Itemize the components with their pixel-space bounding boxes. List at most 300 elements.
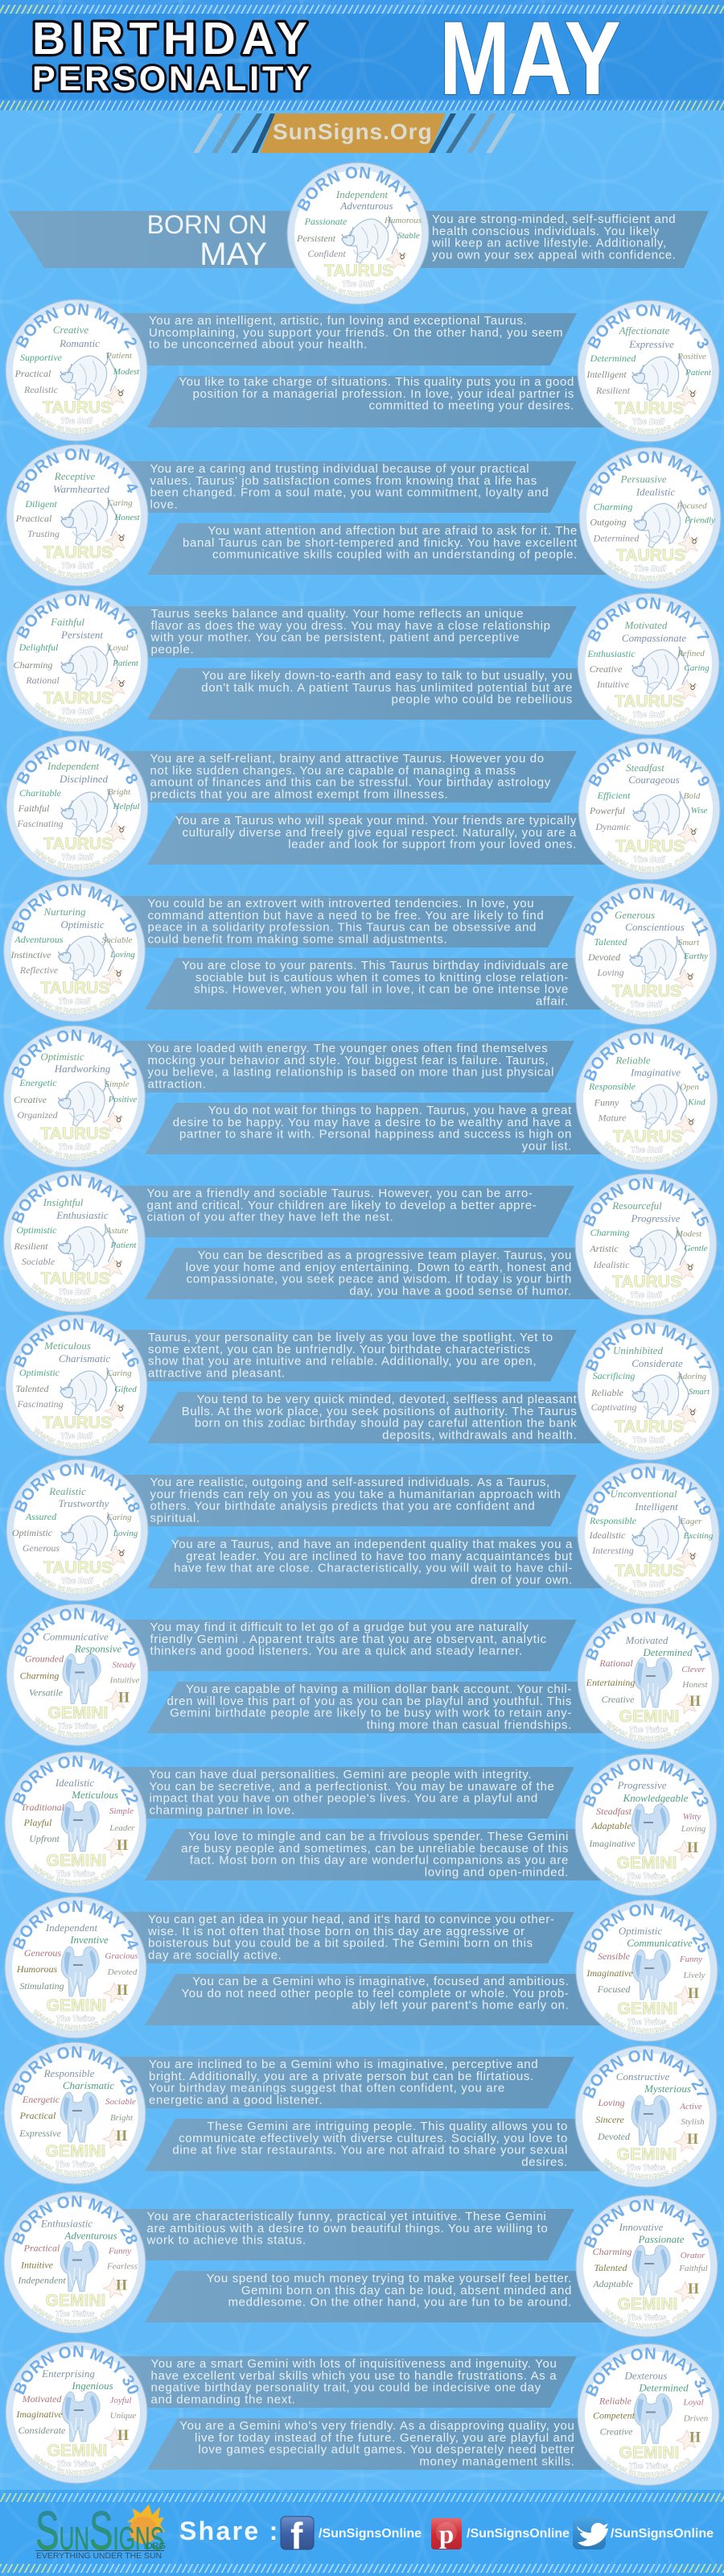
badge: May 9 bbox=[578, 738, 720, 880]
icon: facebook bbox=[281, 2515, 314, 2557]
badge: May 15: Charming bbox=[590, 1227, 629, 1238]
badge: May 1: Confident bbox=[307, 248, 346, 259]
badge: May 30: The Twins bbox=[57, 2460, 97, 2469]
badge: May 17: WWW.SUNSIGNS.ORG bbox=[605, 1431, 691, 1454]
row: May 6 and 7 text panels bbox=[121, 606, 607, 720]
badge: May 22: Idealistic bbox=[55, 1777, 94, 1789]
badge: May 25: Sensible bbox=[598, 1951, 631, 1962]
badge: May 1 bbox=[286, 162, 430, 305]
badge: May 6: Loyal bbox=[107, 643, 129, 653]
row: May 24 and 25 text panels: boisterous but you could be a bit spoiled. The Gemini born on this bbox=[148, 1937, 533, 1951]
row: May 26 and 27 text panels: Your birthday meanings suggest that often confident, you are bbox=[149, 2082, 505, 2095]
badge: May 29: Charming bbox=[593, 2246, 631, 2257]
row: May 18 and 19 text panels: great leader. You are inclined to have too many acquaintances but bbox=[186, 1550, 573, 1563]
badge: May 11: Talented bbox=[594, 936, 627, 947]
badge: May 15: Gentle bbox=[684, 1244, 708, 1253]
badge: May 31: Dexterous bbox=[624, 2370, 667, 2381]
badge: May 8: Bright bbox=[108, 787, 131, 797]
badge: May 4: BORN ON MAY 4 bbox=[16, 448, 138, 493]
badge: May 10: The Bull bbox=[59, 997, 90, 1006]
badge: May 25: Funny bbox=[679, 1955, 702, 1964]
badge: May 4 bbox=[6, 444, 149, 587]
badge: May 2: Creative bbox=[53, 324, 88, 336]
badge: May 24: Gracious bbox=[105, 1951, 138, 1961]
title: birthday personality: PERSONALITY bbox=[32, 60, 313, 98]
row: May 8 and 9 text panels: amount of finances and this can be stressful. Your birthday astrology bbox=[150, 776, 551, 790]
badge: May 2: Practical bbox=[14, 368, 51, 379]
badge: May 1: ♉ bbox=[398, 251, 406, 262]
row: May 20 and 21 text panels: thing more than casual friendships. bbox=[367, 1718, 572, 1732]
badge: May 11 bbox=[575, 883, 717, 1025]
badge: May 14: WWW.SUNSIGNS.ORG bbox=[31, 1283, 117, 1306]
badge: May 29: Passionate bbox=[637, 2233, 685, 2245]
badge: May 16: Charismatic bbox=[59, 1352, 110, 1364]
badge: May 28: II bbox=[116, 2277, 127, 2294]
badge: May 2: Realistic bbox=[23, 384, 59, 395]
row: May 6 and 7 text panels: Taurus seeks balance and quality. Your home reflects an unique bbox=[151, 607, 524, 621]
panel: born on may intro band: MAY bbox=[200, 237, 267, 272]
badge: May 27: Stylish bbox=[681, 2117, 705, 2127]
row: May 2 and 3 text panels: Uncomplaining, you support your friends. On the other hand, you seem bbox=[149, 326, 563, 340]
row: May 28 and 29 text panels: Gemini born on this day can be loud, absent minded and bbox=[241, 2284, 572, 2297]
row: May 28 and 29 text panels: You are characteristically funny, practical yet intuitive. These Gemini bbox=[146, 2210, 546, 2223]
badge: May 6: ♉ bbox=[117, 679, 125, 689]
badge: May 26: Energetic bbox=[22, 2094, 60, 2105]
badge: May 20: Intuitive bbox=[109, 1676, 139, 1686]
badge: May 3: Intelligent bbox=[586, 369, 627, 380]
badge: May 11: Earthy bbox=[683, 952, 708, 961]
badge: May 26: Responsible bbox=[43, 2067, 95, 2079]
badge: May 29: The Twins bbox=[627, 2314, 667, 2322]
badge: May 25: Lively bbox=[683, 1971, 705, 1980]
logo: sunsigns: EVERYTHING UNDER THE SUN bbox=[36, 2552, 162, 2561]
badge: May 25: GEMINI bbox=[618, 2000, 677, 2018]
row: May 20 and 21 text panels bbox=[121, 1620, 607, 1733]
badge: May 26: Sociable bbox=[105, 2097, 136, 2107]
badge: May 21: Rational bbox=[599, 1657, 633, 1669]
badge: May 3: Expressive bbox=[628, 338, 674, 350]
row: May 26 and 27 text panels: dine at five star restaurants. You are not afraid to share your sexual bbox=[172, 2144, 568, 2157]
row: May 2 and 3 text panels: to be unconcerned about your health. bbox=[149, 338, 368, 352]
badge: May 12: TAURUS bbox=[41, 1125, 109, 1143]
badge: May 15: Resourceful bbox=[611, 1199, 662, 1212]
badge: May 24: The Twins bbox=[56, 2015, 96, 2024]
badge: May 8: Independent bbox=[47, 760, 100, 772]
title: birthday personality bbox=[32, 13, 313, 98]
row: May 10 and 11 text panels bbox=[119, 896, 605, 1009]
badge: May 1: TAURUS bbox=[324, 262, 393, 280]
badge: May 7: ♉ bbox=[689, 682, 697, 692]
badge: May 20: GEMINI bbox=[48, 1703, 108, 1723]
row: May 2 and 3 text panels: You like to take charge of situations. This quality puts you in a good bbox=[179, 375, 574, 389]
badge: May 25: WWW.SUNSIGNS.ORG bbox=[602, 2012, 692, 2037]
badge: May 23: Witty bbox=[683, 1812, 701, 1822]
row: May 24 and 25 text panels: day are socially active. bbox=[148, 1948, 282, 1962]
row: May 30 and 31 text panels: You are a Gemini who's very friendly. As a disapproving quality, you bbox=[179, 2419, 574, 2433]
badge: May 1: WWW.SUNSIGNS.ORG bbox=[315, 275, 401, 298]
badge: May 5: Persuasive bbox=[619, 473, 667, 485]
badge: May 13: Imaginative bbox=[630, 1066, 681, 1079]
share label: Share : bbox=[179, 2516, 280, 2545]
badge: May 4: Trusting bbox=[27, 528, 60, 539]
badge: May 14: TAURUS bbox=[41, 1269, 109, 1288]
badge: May 21: Clever bbox=[681, 1665, 705, 1674]
badge: May 21: GEMINI bbox=[619, 1707, 679, 1726]
badge: May 8: ♉ bbox=[117, 824, 125, 835]
badge: May 27: II bbox=[687, 2131, 698, 2148]
badge: May 3: Determined bbox=[590, 353, 636, 364]
badge: May 6: The Bull bbox=[61, 708, 93, 716]
badge: May 14: Resilient bbox=[13, 1241, 48, 1252]
row: May 26 and 27 text panels: communicate effectively with diverse cultures. Socially, you love to bbox=[179, 2132, 568, 2145]
badge: May 5: Friendly bbox=[684, 515, 715, 525]
badge: May 31: Driven bbox=[683, 2413, 709, 2423]
badge: May 21: WWW.SUNSIGNS.ORG bbox=[603, 1719, 693, 1744]
badge: May 16: Meticulous bbox=[43, 1340, 91, 1352]
badge: May 22: The Twins bbox=[56, 1870, 96, 1879]
badge: May 5: TAURUS bbox=[616, 546, 685, 565]
badge: May 31: Reliable bbox=[599, 2396, 632, 2407]
badge: May 24: GEMINI bbox=[47, 1996, 106, 2015]
badge: May 24: WWW.SUNSIGNS.ORG bbox=[31, 2008, 121, 2033]
badge: May 14: Optimistic bbox=[16, 1224, 57, 1236]
badge: May 1: Stable bbox=[397, 231, 420, 241]
site banner bbox=[193, 114, 516, 153]
row: May 2 and 3 text panels: committed to meeting your desires. bbox=[368, 399, 574, 413]
row: May 16 and 17 text panels: Taurus, your personality can be lively as you love the spotlight. Yet to bbox=[148, 1331, 553, 1344]
row: May 24 and 25 text panels: You can be a Gemini who is imaginative, focused and ambitious. bbox=[192, 1975, 570, 1988]
badge: May 18 bbox=[6, 1459, 148, 1601]
badge: May 10: Nurturing bbox=[43, 906, 86, 918]
icon: pinterest: p bbox=[439, 2520, 454, 2549]
badge: May 17 bbox=[578, 1319, 719, 1460]
badge: May 28: Adventurous bbox=[64, 2230, 117, 2241]
row: May 16 and 17 text panels: some extent, you can be unfriendly. Your birthdate characteristics bbox=[148, 1343, 530, 1356]
row: May 18 and 19 text panels bbox=[121, 1475, 607, 1588]
site banner: SunSigns.Org bbox=[273, 119, 433, 144]
row: May 28 and 29 text panels: work to achieve this status. bbox=[146, 2234, 306, 2248]
badge: May 1: Persistent bbox=[296, 233, 336, 244]
badge: May 9: Bold bbox=[684, 791, 701, 801]
row: May 16 and 17 text panels: show that you are intuitive and reliable. Additionally, you are open, bbox=[148, 1355, 537, 1368]
row: May 30 and 31 text panels: live for today instead of the future. Generally, you are playful and bbox=[195, 2431, 574, 2445]
row: May 18 and 19 text panels: You are realistic, outgoing and self-assured individuals. As a Taurus, bbox=[150, 1476, 550, 1489]
badge: May 3: BORN ON MAY 3 bbox=[587, 304, 710, 349]
badge: May 1: BORN ON MAY 1 bbox=[296, 166, 418, 213]
badge: May 1: Humorous bbox=[384, 216, 422, 225]
badge: May 4: The Bull bbox=[61, 562, 93, 571]
row: May 24 and 25 text panels bbox=[119, 1912, 605, 2025]
icon: pinterest bbox=[431, 2518, 462, 2549]
badge: May 30: BORN ON MAY 30 bbox=[10, 2343, 143, 2397]
badge: May 31: Creative bbox=[600, 2426, 633, 2438]
title: may: MAY bbox=[439, 0, 621, 117]
badge: May 23: Loving bbox=[681, 1824, 706, 1834]
badge: May 25: Focused bbox=[597, 1984, 631, 1995]
panel: born on may intro band: will keep an active lifestyle. Additionally, bbox=[431, 237, 667, 250]
badge: May 17: BORN ON MAY 17 bbox=[585, 1322, 712, 1372]
badge: May 30: Unique bbox=[110, 2411, 136, 2421]
badge: May 16: The Bull bbox=[60, 1432, 93, 1441]
row: May 18 and 19 text panels: dren of your own. bbox=[471, 1573, 573, 1587]
badge: May 28 bbox=[4, 2191, 146, 2333]
badge: May 24: Humorous bbox=[16, 1963, 57, 1975]
badge: May 3 bbox=[577, 299, 720, 443]
badge: May 28: The Twins bbox=[56, 2310, 95, 2318]
badge: May 26: Bright bbox=[110, 2113, 134, 2123]
badge: May 6: BORN ON MAY 6 bbox=[16, 594, 138, 639]
badge: May 17: Sacrificing bbox=[593, 1370, 635, 1381]
badge: May 12: Positive bbox=[108, 1095, 137, 1104]
badge: May 23: Knowledgeable bbox=[623, 1792, 689, 1804]
row: May 12 and 13 text panels: your list. bbox=[522, 1139, 572, 1153]
badge: May 12: The Bull bbox=[59, 1143, 90, 1152]
badge: May 28: Enthusiastic bbox=[40, 2217, 93, 2230]
row: May 20 and 21 text panels: dren will love this part of you as you can be playful and youthful. This bbox=[167, 1695, 572, 1708]
badge: May 21: Entertaining bbox=[586, 1677, 635, 1688]
badge: May 7: Motivated bbox=[624, 619, 668, 631]
row: May 12 and 13 text panels: desire to be happy. You may have a desire to be wealthy and have a bbox=[173, 1116, 572, 1129]
badge: May 4: Warmhearted bbox=[53, 483, 110, 495]
badge: May 19: Intelligent bbox=[634, 1501, 678, 1513]
badge: May 8: TAURUS bbox=[43, 835, 113, 853]
badge: May 2: Patient bbox=[105, 351, 133, 361]
badge: May 23: Steadfast bbox=[596, 1806, 632, 1817]
badge: May 30: Ingenious bbox=[71, 2380, 113, 2392]
badge: May 25: Communicative bbox=[627, 1937, 693, 1949]
badge: May 7: BORN ON MAY 7 bbox=[587, 597, 710, 642]
badge: May 3: Affectionate bbox=[619, 324, 670, 336]
badge: May 11: TAURUS bbox=[612, 982, 681, 1001]
badge: May 30: Joyful bbox=[110, 2396, 131, 2405]
badge: May 20: Grounded bbox=[25, 1653, 64, 1665]
badge: May 17: Adoring bbox=[677, 1372, 707, 1381]
row: May 22 and 23 text panels: impact that you have on other people's lives. You are a playful and bbox=[150, 1792, 538, 1806]
badge: May 21: Determined bbox=[642, 1646, 693, 1658]
badge: May 21: II bbox=[689, 1693, 701, 1710]
badge: May 28: Independent bbox=[17, 2275, 66, 2286]
badge: May 15 bbox=[575, 1174, 717, 1315]
badge: May 21: BORN ON MAY 21 bbox=[582, 1608, 715, 1663]
badge: May 11: Conscientious bbox=[625, 921, 685, 933]
badge: May 5: Focused bbox=[676, 501, 707, 510]
badge: May 23: Adaptable bbox=[590, 1820, 631, 1831]
badge: May 6: WWW.SUNSIGNS.ORG bbox=[34, 703, 120, 724]
row: May 14 and 15 text panels: day, you have a good sense of humor. bbox=[349, 1284, 572, 1298]
row: May 10 and 11 text panels: peace in a solidarity profession. This Taurus can be obsessive and bbox=[148, 921, 537, 935]
badge: May 26: WWW.SUNSIGNS.ORG bbox=[30, 2154, 120, 2179]
badge: May 11: Loving bbox=[596, 967, 624, 978]
badge: May 2: Supportive bbox=[20, 352, 63, 363]
badge: May 26: Charismatic bbox=[63, 2079, 114, 2091]
row: May 10 and 11 text panels: affair. bbox=[536, 994, 569, 1008]
badge: May 22: WWW.SUNSIGNS.ORG bbox=[31, 1864, 121, 1889]
row: May 10 and 11 text panels: sociable but is cautious when it comes to knitting close relation- bbox=[195, 971, 569, 985]
badge: May 9: BORN ON MAY 9 bbox=[587, 742, 710, 787]
badge: May 12: Hardworking bbox=[54, 1063, 111, 1075]
badge: May 20: Versatile bbox=[29, 1687, 64, 1699]
row: May 16 and 17 text panels bbox=[121, 1330, 607, 1443]
panel: born on may intro band: BORN ON bbox=[147, 210, 267, 239]
badge: May 16: Gifted bbox=[114, 1385, 137, 1394]
badge: May 10: TAURUS bbox=[41, 979, 109, 997]
badge: May 18: Generous bbox=[23, 1542, 60, 1554]
badge: May 20: Charming bbox=[20, 1670, 59, 1681]
badge: May 16: WWW.SUNSIGNS.ORG bbox=[34, 1427, 119, 1449]
row: May 18 and 19 text panels: have few that are close. Characteristically, you will wait to have chil- bbox=[174, 1562, 573, 1575]
badge: May 18: Trustworthy bbox=[59, 1497, 109, 1509]
row: May 4 and 5 text panels: You want attention and affection but are afraid to ask for it. The bbox=[208, 524, 578, 538]
badge: May 6: Faithful bbox=[50, 616, 84, 628]
badge: May 12: WWW.SUNSIGNS.ORG bbox=[31, 1138, 117, 1161]
badge: May 24: Generous bbox=[24, 1947, 61, 1959]
badge: May 18: Assured bbox=[25, 1511, 57, 1522]
badge: May 5: WWW.SUNSIGNS.ORG bbox=[607, 560, 693, 582]
badge: May 25: Optimistic bbox=[619, 1925, 662, 1937]
badge: May 5: Outgoing bbox=[590, 517, 627, 528]
badge: May 30: Considerate bbox=[19, 2425, 66, 2436]
row: May 16 and 17 text panels: Bulls. At the work place, you seek positions of authority. The Taurus bbox=[182, 1405, 578, 1418]
badge: May 22: II bbox=[117, 1837, 128, 1854]
badge: May 6: Delightful bbox=[19, 642, 59, 653]
badge: May 31: Determined bbox=[638, 2381, 689, 2394]
badge: May 29: GEMINI bbox=[618, 2295, 677, 2314]
badge: May 19: BORN ON MAY 19 bbox=[585, 1466, 711, 1516]
badge: May 21: The Twins bbox=[629, 1726, 668, 1735]
badge: May 5: The Bull bbox=[634, 565, 666, 573]
badge: May 24: Stimulating bbox=[19, 1980, 64, 1992]
badge: May 12: Simple bbox=[105, 1080, 130, 1089]
row: May 22 and 23 text panels: are busy people and sometimes, can be unreliable because of this bbox=[181, 1842, 569, 1856]
badge: May 29: Faithful bbox=[678, 2264, 708, 2273]
badge: May 9: Powerful bbox=[589, 805, 626, 816]
badge: May 12: Organized bbox=[17, 1109, 59, 1121]
row: May 10 and 11 text panels: You could be an extrovert with introverted tendencies. In love, you bbox=[148, 897, 534, 910]
badge: May 15: Idealistic bbox=[593, 1259, 630, 1270]
badge: May 5: BORN ON MAY 5 bbox=[589, 451, 711, 496]
row: May 10 and 11 text panels: ships. However, when you fall in love, it can be one intense love bbox=[194, 983, 569, 997]
badge: May 22: Meticulous bbox=[71, 1789, 118, 1801]
badge: May 22: Leader bbox=[109, 1823, 135, 1833]
badge: May 21 bbox=[578, 1608, 719, 1749]
badge: May 29: Orator bbox=[681, 2251, 705, 2260]
badge: May 9: The Bull bbox=[633, 856, 665, 865]
row: May 4 and 5 text panels: love. bbox=[150, 497, 178, 511]
badge: May 22 bbox=[5, 1752, 146, 1893]
badge: May 14: BORN ON MAY 14 bbox=[11, 1174, 138, 1224]
row: May 22 and 23 text panels: charming partner in love. bbox=[150, 1803, 295, 1817]
badge: May 13: Funny bbox=[594, 1096, 619, 1108]
badge: May 15: TAURUS bbox=[612, 1273, 681, 1291]
row: May 22 and 23 text panels: You love to mingle and can be a frivolous spender. These Gemini bbox=[188, 1830, 569, 1843]
badge: May 19: Idealistic bbox=[589, 1530, 626, 1541]
title: birthday personality: BIRTHDAY bbox=[32, 13, 313, 64]
badge: May 15: Progressive bbox=[630, 1212, 681, 1224]
badge: May 1: Adventurous bbox=[339, 200, 393, 212]
row: May 30 and 31 text panels: love games especially adult games. You desperately need better bbox=[198, 2443, 574, 2457]
badge: May 10 bbox=[3, 880, 145, 1022]
badge: May 10: BORN ON MAY 10 bbox=[11, 883, 137, 933]
badge: May 11: Generous bbox=[615, 909, 655, 921]
row: May 6 and 7 text panels: people. bbox=[151, 642, 194, 656]
row: May 14 and 15 text panels: You are a friendly and sociable Taurus. However, you can be arro- bbox=[146, 1187, 533, 1200]
panel: born on may intro band: you own your sex appeal with confidence. bbox=[432, 248, 677, 262]
badge: May 9: Dynamic bbox=[594, 821, 631, 832]
badge: May 8: Charitable bbox=[19, 787, 62, 799]
row: May 24 and 25 text panels: You can get an idea in your head, and it's hard to convince you other- bbox=[148, 1913, 555, 1926]
badge: May 13: The Bull bbox=[631, 1146, 663, 1154]
badge: May 16 bbox=[6, 1315, 147, 1456]
badge: May 14: Enthusiastic bbox=[56, 1209, 109, 1221]
row: May 2 and 3 text panels: position for a managerial profession. In love, your ideal partner is bbox=[193, 387, 574, 401]
row: May 18 and 19 text panels: others. Your birthdate analysis predicts that you are confident and bbox=[150, 1500, 535, 1513]
badge: May 30: WWW.SUNSIGNS.ORG bbox=[31, 2454, 121, 2479]
row: May 30 and 31 text panels bbox=[121, 2356, 607, 2470]
badge: May 5: ♉ bbox=[690, 536, 698, 546]
badge: May 13: Responsible bbox=[588, 1080, 636, 1092]
row: May 6 and 7 text panels: You are likely down-to-earth and easy to talk to but usually, you bbox=[202, 669, 573, 683]
badge: May 10: Reflective bbox=[19, 964, 59, 976]
badge: May 30: Motivated bbox=[22, 2393, 62, 2405]
icon: facebook: f bbox=[290, 2515, 303, 2557]
badge: May 20: BORN ON MAY 20 bbox=[14, 1607, 140, 1657]
badge: May 1: The Bull bbox=[342, 280, 374, 289]
badge: May 4: Honest bbox=[113, 513, 141, 522]
badge: May 6: Persistent bbox=[60, 629, 103, 641]
badge: May 20 bbox=[6, 1604, 148, 1745]
row: May 30 and 31 text panels: You are a smart Gemini with lots of inquisitiveness and ingenuity. You bbox=[151, 2357, 557, 2371]
badge: May 13: Open bbox=[680, 1082, 699, 1092]
row: May 30 and 31 text panels: money management skills. bbox=[419, 2454, 574, 2468]
badge: May 10: ♉ bbox=[115, 968, 122, 979]
badge: May 31 bbox=[578, 2344, 719, 2486]
badge: May 29: Innovative bbox=[619, 2221, 664, 2233]
row: May 28 and 29 text panels: meddlesome. On the other hand, you are fun to be around. bbox=[228, 2296, 572, 2310]
badge: May 27: Sincere bbox=[595, 2114, 624, 2125]
badge: May 17: Captivating bbox=[591, 1402, 636, 1413]
badge: May 30: II bbox=[117, 2427, 129, 2444]
row: May 20 and 21 text panels: You may find it difficult to let go of a grudge but you are naturally bbox=[150, 1620, 529, 1634]
badge: May 27: The Twins bbox=[627, 2164, 666, 2173]
badge: May 3: TAURUS bbox=[615, 399, 684, 418]
badge: May 28: Practical bbox=[23, 2243, 60, 2254]
badge: May 23: BORN ON MAY 23 bbox=[579, 1755, 713, 1810]
badge: May 20: WWW.SUNSIGNS.ORG bbox=[34, 1716, 120, 1739]
row: May 8 and 9 text panels: You are a Taurus who will speak your mind. Your friends are typically bbox=[175, 814, 577, 828]
badge: May 3: WWW.SUNSIGNS.ORG bbox=[605, 413, 691, 435]
badge: May 29: Talented bbox=[594, 2262, 627, 2273]
badge: May 18: BORN ON MAY 18 bbox=[14, 1463, 140, 1513]
badge: May 12: ♉ bbox=[115, 1114, 122, 1125]
row: May 28 and 29 text panels: are ambitious with a desire to own beautiful things. You are willing to bbox=[146, 2222, 548, 2235]
row: May 6 and 7 text panels: flavor as does the way you dress. You may have a close relationship bbox=[151, 619, 551, 633]
badge: May 30: Imaginative bbox=[15, 2409, 63, 2420]
badge: May 28: GEMINI bbox=[46, 2291, 105, 2310]
badge: May 17: TAURUS bbox=[615, 1418, 684, 1436]
badge: May 1: Passionate bbox=[304, 216, 348, 227]
badge: May 15: ♉ bbox=[686, 1262, 694, 1273]
row: May 18 and 19 text panels: You are a Taurus, and have an independent quality that makes you a bbox=[171, 1538, 573, 1551]
badge: May 21: Creative bbox=[602, 1694, 635, 1705]
badge: May 12: Creative bbox=[14, 1094, 47, 1105]
badge: May 10: Instinctive bbox=[10, 949, 51, 960]
badge: May 13: WWW.SUNSIGNS.ORG bbox=[603, 1141, 689, 1163]
badge: May 2 bbox=[5, 299, 148, 442]
badge: May 9: Courageous bbox=[628, 774, 680, 786]
logo: sunsigns: .ORG bbox=[143, 2541, 166, 2551]
row: May 8 and 9 text panels: predicts that you are almost exempt from illnesses. bbox=[150, 787, 448, 801]
badge: May 23: Imaginative bbox=[588, 1838, 636, 1849]
